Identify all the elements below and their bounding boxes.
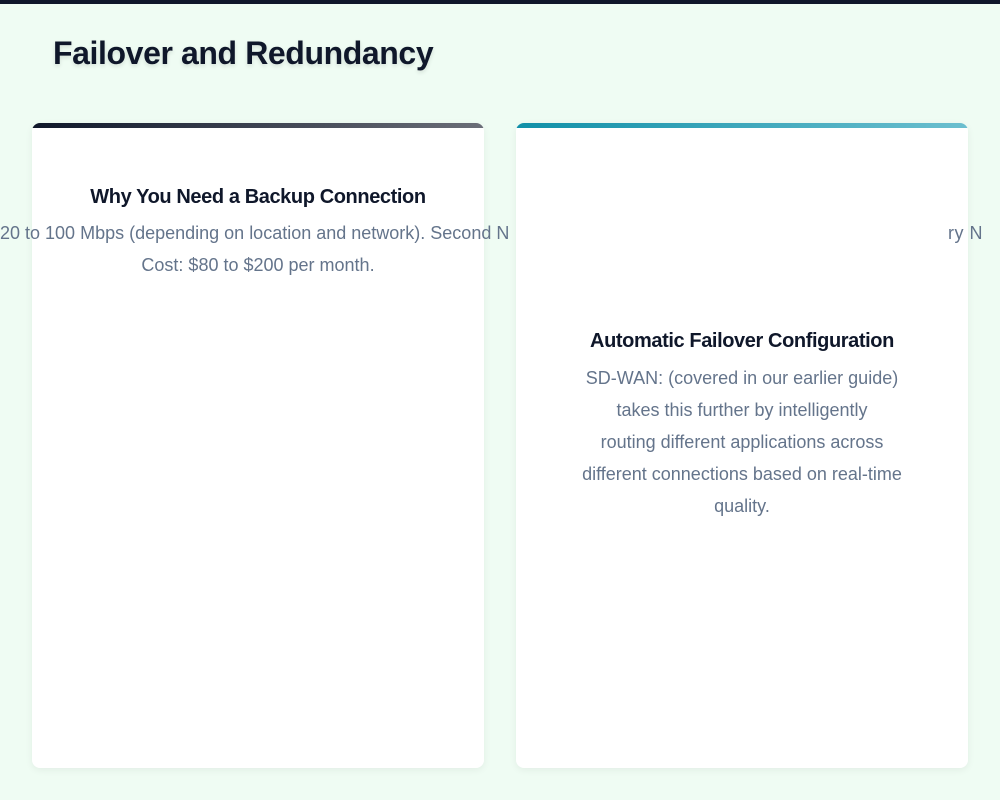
text: SD-WAN: different connections based on real-time: [582, 464, 902, 484]
text: SD-WAN: [582, 368, 902, 516]
heading: failover: Automatic Failover Configuration: [590, 330, 894, 352]
panel: backup connection: [32, 123, 484, 768]
text: SD-WAN: takes this further by intelligently: [616, 400, 868, 420]
text: SD-WAN: SD-WAN: (covered in our earlier guide): [586, 368, 898, 388]
panel: automatic failover: [516, 123, 968, 768]
title: Failover and Redundancy: [53, 35, 433, 71]
text: SD-WAN: routing different applications across: [601, 432, 883, 452]
overflow text line: 20 to 100 Mbps (depending on location and network). Second N: [0, 223, 509, 243]
text: SD-WAN: quality.: [714, 496, 770, 516]
text: cost: Cost: $80 to $200 per month.: [141, 255, 375, 275]
overflow text right: ry N: [948, 223, 983, 243]
heading: backup: Why You Need a Backup Connection: [90, 186, 426, 208]
